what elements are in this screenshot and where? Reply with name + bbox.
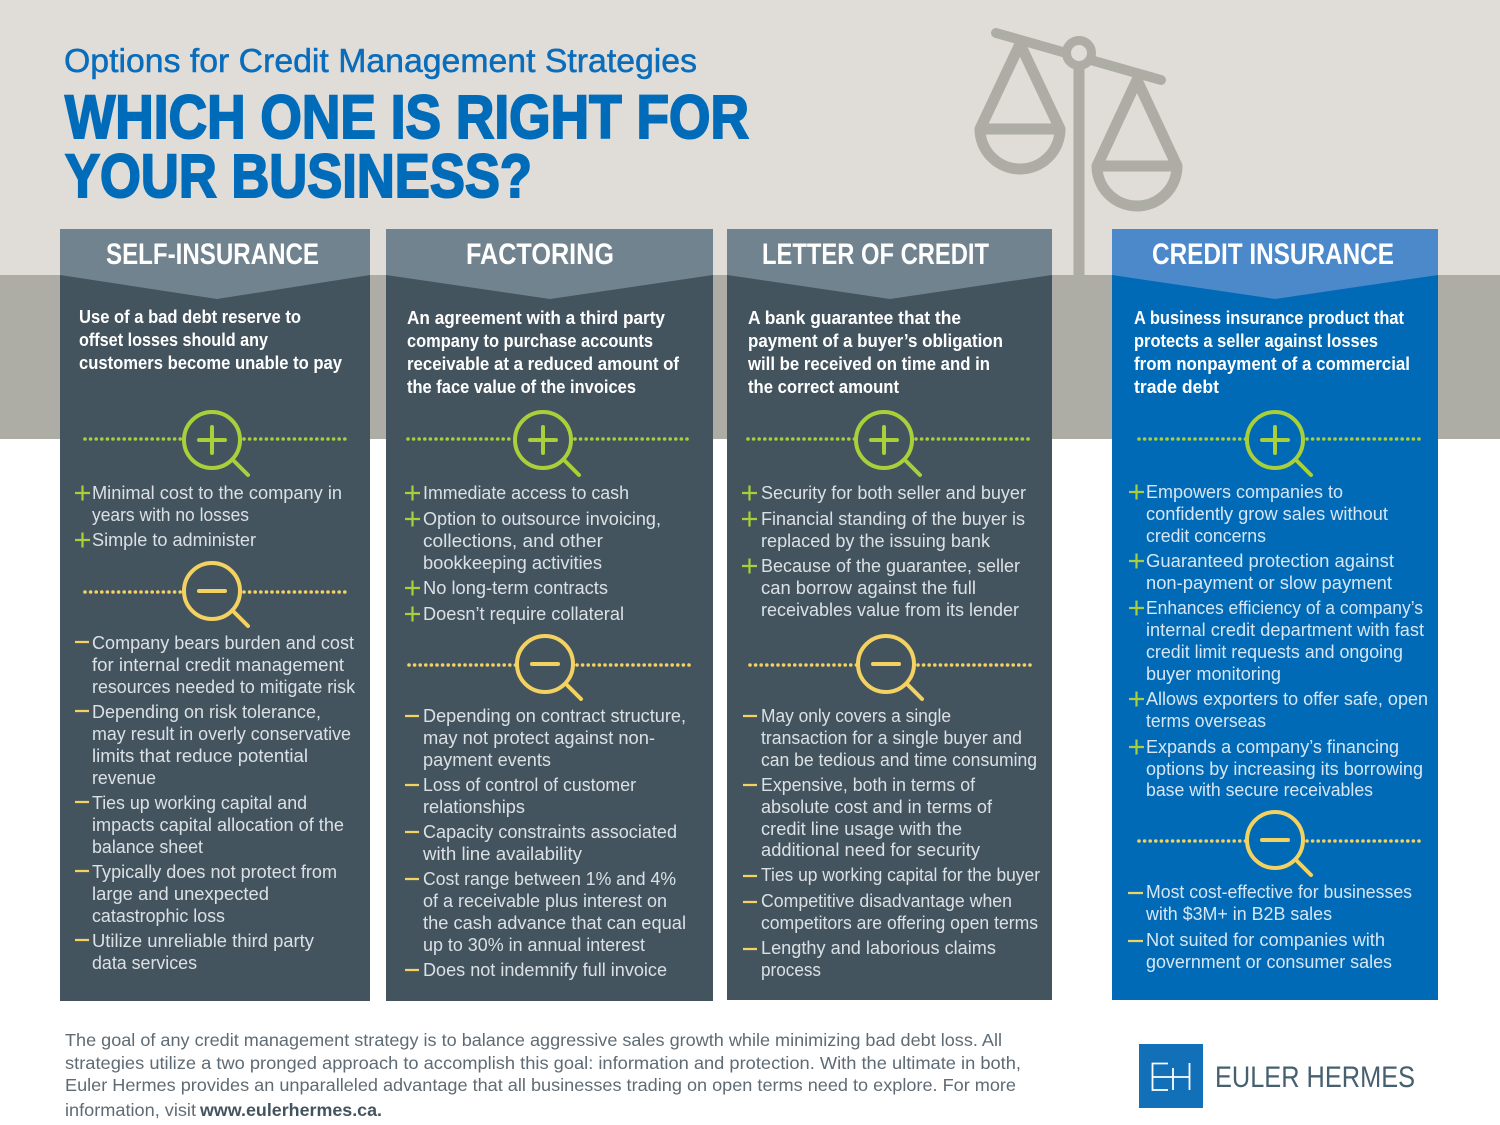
icon: minus magnifier [750, 636, 1033, 699]
heading: letter of credit [727, 229, 1052, 299]
list: letter of credit cons: absolute cost and in terms of [761, 796, 993, 817]
heading: self-insurance [60, 229, 370, 299]
panel: credit insurance [1112, 229, 1438, 1000]
list: credit insurance pros: terms overseas [1146, 710, 1266, 731]
icon: minus magnifier [409, 636, 692, 699]
icon: plus magnifier [408, 412, 690, 475]
list: credit insurance pros: confidently grow sales without [1146, 503, 1388, 524]
description: credit insurance: protects a seller against losses [1134, 331, 1378, 351]
description: factoring: the face value of the invoices [407, 377, 636, 397]
footer text: Euler Hermes provides an unparalleled advantage that all businesses trading on open terms need to explore. For more [65, 1075, 1016, 1095]
panel: factoring [386, 229, 713, 1001]
list: letter of credit cons: May only covers a single [761, 705, 951, 726]
list: self-insurance cons: balance sheet [92, 836, 203, 857]
list: letter of credit pros: Financial standing of the buyer is [761, 508, 1025, 529]
description: letter of credit: will be received on time and in [747, 354, 990, 374]
list: credit insurance cons: Most cost-effective for businesses [1146, 881, 1412, 902]
logo: Euler Hermes: EULER HERMES [1215, 1061, 1415, 1094]
list: self-insurance pros: Minimal cost to the company in [92, 482, 342, 503]
list: factoring cons: Cost range between 1% and 4% [423, 868, 676, 889]
panel: letter of credit [727, 229, 1052, 1000]
list: factoring cons: Capacity constraints associated [423, 821, 677, 842]
footer text: strategies utilize a two pronged approach to accomplish this goal: information and protection. With the ultimate in both, [65, 1053, 1021, 1073]
description: credit insurance: trade debt [1134, 377, 1219, 397]
icon: plus magnifier [748, 412, 1031, 475]
list: factoring pros: bookkeeping activities [423, 552, 602, 573]
list: credit insurance cons: government or consumer sales [1146, 951, 1392, 972]
list: factoring cons: may not protect against non- [423, 727, 655, 748]
list: factoring pros [405, 482, 661, 624]
subtitle: Options for Credit Management Strategies [64, 42, 697, 79]
logo: Euler Hermes [1139, 1044, 1415, 1108]
list: credit insurance pros: base with secure receivables [1146, 779, 1373, 800]
footer text [65, 1030, 1021, 1120]
list: credit insurance pros: Empowers companies to [1146, 481, 1343, 502]
heading: factoring: FACTORING [466, 238, 614, 271]
list: self-insurance cons: revenue [92, 767, 156, 788]
heading: credit insurance: CREDIT INSURANCE [1152, 238, 1394, 271]
list: letter of credit cons: additional need for security [761, 839, 981, 860]
list: letter of credit pros: replaced by the issuing bank [761, 530, 991, 551]
title: WHICH ONE IS RIGHT FOR [65, 83, 749, 151]
heading: factoring [386, 229, 713, 299]
description: letter of credit [747, 308, 1003, 397]
icon: minus magnifier [85, 563, 350, 626]
list: credit insurance pros: internal credit department with fast [1146, 619, 1424, 640]
list: self-insurance cons: Depending on risk tolerance, [92, 701, 321, 722]
list: factoring cons: with line availability [422, 843, 583, 864]
description: letter of credit: A bank guarantee that the [748, 308, 961, 328]
list: self-insurance cons: Utilize unreliable third party [92, 930, 315, 951]
list: self-insurance pros [75, 482, 342, 550]
list: self-insurance cons: Typically does not protect from [92, 861, 337, 882]
list: self-insurance cons: impacts capital allocation of the [92, 814, 344, 835]
list: factoring cons: of a receivable plus interest on [423, 890, 667, 911]
heading: self-insurance: SELF-INSURANCE [106, 238, 319, 271]
list: self-insurance cons: Ties up working capital and [92, 792, 307, 813]
description: credit insurance: from nonpayment of a commercial [1134, 354, 1410, 374]
description: factoring: receivable at a reduced amount of [407, 354, 680, 374]
list: factoring cons: up to 30% in annual interest [423, 934, 645, 955]
footer text: The goal of any credit management strategy is to balance aggressive sales growth while minimizing bad debt loss. All [65, 1030, 1002, 1050]
list: letter of credit pros: can borrow against the full [761, 577, 976, 598]
list: factoring pros: Option to outsource invoicing, [423, 508, 661, 529]
list: factoring cons: Loss of control of customer [423, 774, 636, 795]
icon: minus magnifier [1139, 812, 1422, 875]
list: factoring cons: relationships [423, 796, 525, 817]
list: credit insurance pros: Expands a company’s financing [1146, 736, 1399, 757]
list: factoring pros: Doesn’t require collateral [423, 603, 624, 624]
icon: plus magnifier [85, 412, 350, 475]
list: letter of credit cons: transaction for a single buyer and [761, 727, 1022, 748]
description: credit insurance [1134, 308, 1410, 397]
list: factoring cons: payment events [423, 749, 551, 770]
description: self-insurance: offset losses should any [79, 330, 268, 350]
list: letter of credit cons: process [761, 959, 821, 980]
panel: self-insurance [60, 229, 370, 1001]
list: credit insurance cons: with $3M+ in B2B sales [1145, 903, 1332, 924]
list: letter of credit pros: Security for both seller and buyer [761, 482, 1026, 503]
list: letter of credit cons: competitors are offering open terms [761, 912, 1038, 933]
description: credit insurance: A business insurance product that [1134, 308, 1404, 328]
list: letter of credit cons [743, 705, 1040, 980]
list: letter of credit cons: credit line usage with the [761, 818, 962, 839]
list: self-insurance cons [75, 632, 356, 973]
list: self-insurance cons: catastrophic loss [92, 905, 225, 926]
description: self-insurance: customers become unable to pay [79, 353, 342, 373]
description: factoring: An agreement with a third party [407, 308, 665, 328]
heading: credit insurance [1112, 229, 1438, 299]
list: letter of credit cons: can be tedious and time consuming [761, 749, 1037, 770]
title: YOUR BUSINESS? [65, 142, 532, 210]
list: credit insurance pros: Allows exporters to offer safe, open [1146, 688, 1428, 709]
list: factoring cons: Depending on contract structure, [423, 705, 686, 726]
list: credit insurance pros: Enhances efficiency of a company’s [1146, 597, 1423, 618]
footer text: information, visit [65, 1100, 196, 1120]
list: factoring pros: Immediate access to cash [423, 482, 629, 503]
description: self-insurance [79, 307, 342, 373]
icon: balance scales [980, 33, 1177, 275]
list: self-insurance cons: may result in overly conservative [92, 723, 351, 744]
heading: letter of credit: LETTER OF CREDIT [762, 238, 989, 271]
list: credit insurance pros: options by increasing its borrowing [1146, 758, 1423, 779]
footer text: www.eulerhermes.ca. [199, 1100, 382, 1120]
list: factoring pros: collections, and other [423, 530, 603, 551]
list: letter of credit pros [742, 482, 1026, 620]
list: credit insurance pros: Guaranteed protection against [1146, 550, 1394, 571]
list: self-insurance pros: Simple to administer [92, 529, 256, 550]
description: letter of credit: payment of a buyer’s obligation [748, 331, 1003, 351]
description: self-insurance: Use of a bad debt reserve to [79, 307, 301, 327]
list: self-insurance cons: data services [92, 952, 197, 973]
description: factoring: company to purchase accounts [407, 331, 653, 351]
list: credit insurance cons: Not suited for companies with [1146, 929, 1385, 950]
list: factoring cons: the cash advance that can equal [423, 912, 686, 933]
list: self-insurance cons: limits that reduce potential [92, 745, 308, 766]
title [65, 83, 749, 210]
icon: plus magnifier [1139, 412, 1422, 475]
list: factoring cons: Does not indemnify full invoice [423, 959, 667, 980]
list: credit insurance pros: buyer monitoring [1146, 663, 1281, 684]
list: self-insurance cons: large and unexpected [92, 883, 269, 904]
list: letter of credit cons: Ties up working capital for the buyer [761, 864, 1040, 885]
list: factoring cons [405, 705, 686, 980]
list: self-insurance cons: resources needed to mitigate risk [92, 676, 356, 697]
list: letter of credit pros: Because of the guarantee, seller [761, 555, 1020, 576]
description: letter of credit: the correct amount [748, 377, 899, 397]
list: credit insurance cons [1128, 881, 1412, 972]
description: factoring [407, 308, 680, 397]
list: credit insurance pros: credit concerns [1146, 525, 1266, 546]
list: letter of credit cons: Competitive disadvantage when [761, 890, 1012, 911]
list: letter of credit cons: Lengthy and laborious claims [761, 937, 996, 958]
list: letter of credit cons: Expensive, both in terms of [761, 774, 976, 795]
list: credit insurance pros: non-payment or slow payment [1146, 572, 1392, 593]
list: self-insurance cons: for internal credit management [92, 654, 344, 675]
list: self-insurance cons: Company bears burden and cost [92, 632, 354, 653]
list: factoring pros: No long-term contracts [423, 577, 608, 598]
list: credit insurance pros: credit limit requests and ongoing [1146, 641, 1403, 662]
list: letter of credit pros: receivables value from its lender [761, 599, 1019, 620]
list: credit insurance pros [1129, 481, 1428, 800]
list: self-insurance pros: years with no losses [92, 504, 249, 525]
